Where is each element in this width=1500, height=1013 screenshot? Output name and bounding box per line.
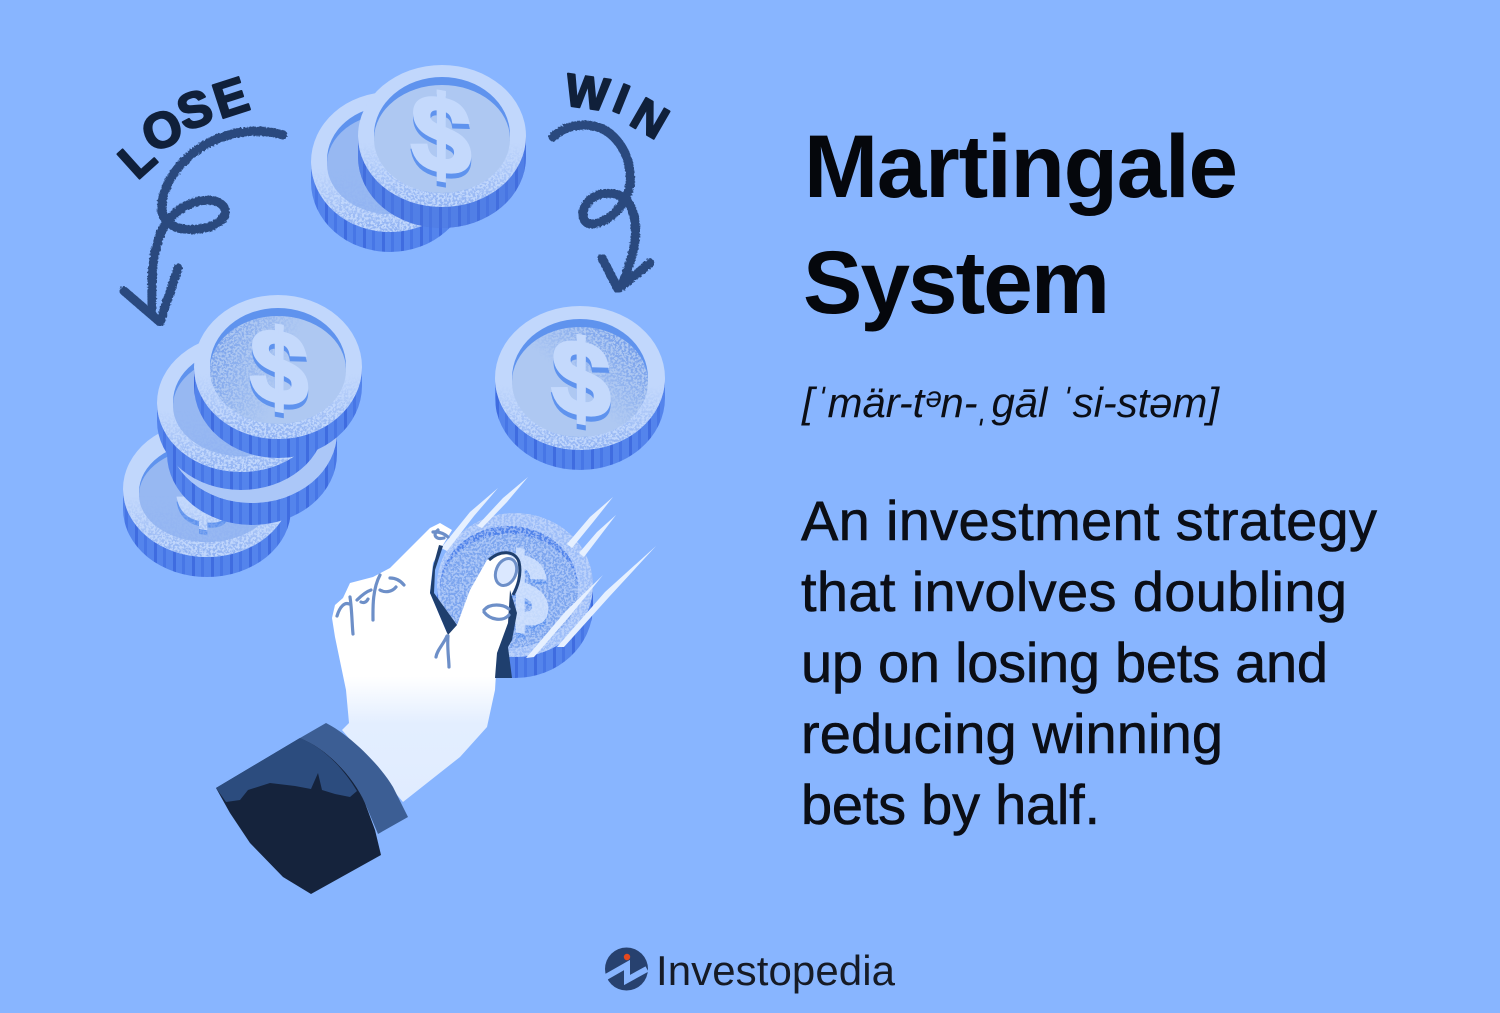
coin stack: left <box>123 295 362 577</box>
finger gap shadow <box>430 545 457 635</box>
label: WIN <box>562 63 677 149</box>
label: WIN: N <box>623 87 677 149</box>
dollar sign: $ <box>411 74 471 206</box>
coin: front <box>358 65 526 228</box>
thumb shadow <box>495 590 517 678</box>
dollar sign: $ <box>492 530 548 651</box>
label: LOSE: L <box>109 130 166 189</box>
dollar sign: $ <box>177 438 229 550</box>
label: WIN: I <box>607 75 636 123</box>
title: System <box>803 232 1110 332</box>
jacket highlight <box>216 738 357 802</box>
thumb nail <box>491 555 521 589</box>
coin: bottom <box>123 421 291 577</box>
definition <box>801 489 1377 836</box>
logo: Investopedia <box>605 947 896 994</box>
cuff <box>300 723 408 834</box>
thumb outline <box>489 553 520 595</box>
definition: up on losing bets and <box>801 631 1328 694</box>
definition: An investment strategy <box>801 489 1377 552</box>
wordmark: Investopedia <box>656 947 896 994</box>
title <box>803 116 1238 332</box>
dollar sign: $ <box>492 535 548 656</box>
pronunciation: [ˈmär-tᵊn-ˌgāl ˈsi-stəm] <box>801 379 1220 426</box>
dollar sign: $ <box>250 305 308 431</box>
coin: back <box>311 92 469 252</box>
coin: right <box>495 306 665 470</box>
logo mark <box>605 948 648 990</box>
label: LOSE: S <box>170 78 219 142</box>
definition: reducing winning <box>801 702 1223 765</box>
dollar sign: $ <box>411 69 471 201</box>
hand <box>332 523 521 802</box>
label: WIN: W <box>562 63 613 121</box>
coin: held in hand <box>437 513 593 678</box>
illustration: coins and hand <box>109 63 677 894</box>
motion streaks <box>441 477 656 658</box>
label: LOSE: O <box>134 97 190 163</box>
definition: bets by half. <box>801 773 1100 836</box>
dollar sign: $ <box>177 433 229 545</box>
knuckle and finger lines <box>337 530 509 667</box>
coin stack: top pair <box>311 65 526 252</box>
dollar sign: $ <box>552 319 610 448</box>
sleeve <box>216 723 408 894</box>
definition: that involves doubling <box>801 560 1347 623</box>
coin: second <box>157 334 325 490</box>
coin: third <box>167 361 337 525</box>
arrow: lose <box>124 131 283 322</box>
dollar sign: $ <box>552 314 610 443</box>
dollar sign: $ <box>250 310 308 436</box>
coin: top <box>194 295 362 458</box>
label: LOSE <box>109 66 255 189</box>
jacket <box>216 738 381 894</box>
label: LOSE: E <box>206 66 255 130</box>
arrow: win <box>553 125 650 289</box>
title: Martingale <box>804 116 1238 216</box>
